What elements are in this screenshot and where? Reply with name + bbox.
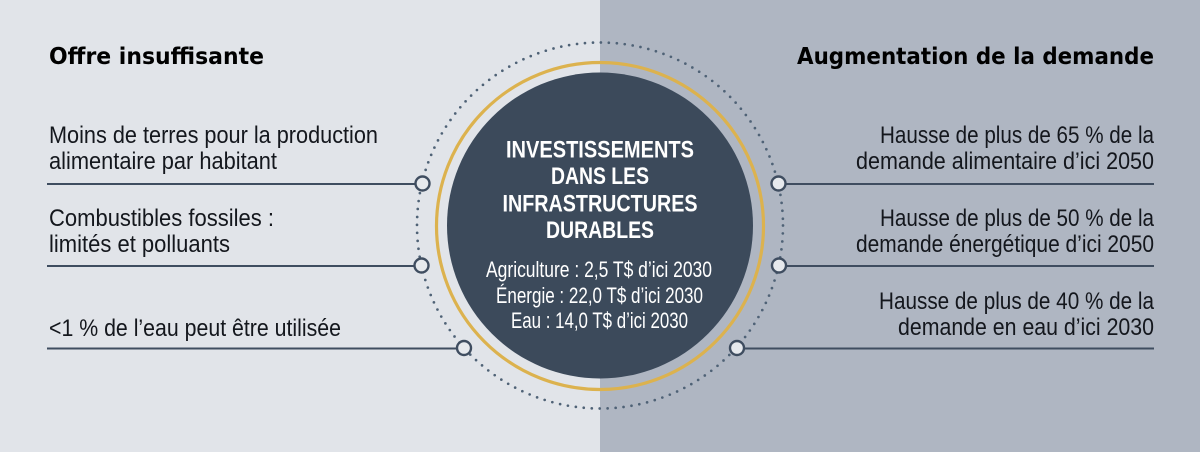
right item: food demand: Hausse de plus de 65 % de la <box>880 122 1154 149</box>
left item: water: <1 % de l’eau peut être utilisée <box>49 315 341 342</box>
right item: water demand <box>730 288 1154 355</box>
heading: left: Offre insuffisante <box>49 44 264 70</box>
left item: fossil fuels: Combustibles fossiles : <box>49 205 274 232</box>
center figures: Énergie : 22,0 T$ d’ici 2030 <box>496 283 703 308</box>
right item: water demand: Hausse de plus de 40 % de la <box>879 288 1154 315</box>
right item: energy demand <box>772 205 1154 272</box>
panel: right background <box>600 0 1200 452</box>
dotted outer ring <box>417 42 783 408</box>
center figures <box>486 257 712 333</box>
left item: land: alimentaire par habitant <box>49 148 277 175</box>
right item: food demand: demande alimentaire d’ici 2050 <box>856 148 1154 175</box>
center figures: Eau : 14,0 T$ d’ici 2030 <box>511 308 688 333</box>
center title: DANS LES <box>551 163 649 190</box>
center title: DURABLES <box>546 217 654 244</box>
left item: water <box>47 315 471 355</box>
right item: energy demand: Hausse de plus de 50 % de la <box>880 205 1154 232</box>
central circle <box>447 72 753 378</box>
panel: left background <box>0 0 600 452</box>
left item: fossil fuels: limités et polluants <box>49 231 230 258</box>
center title: INFRASTRUCTURES <box>502 190 698 218</box>
right item: water demand: demande en eau d’ici 2030 <box>898 314 1154 341</box>
center title: INVESTISSEMENTS <box>506 136 694 164</box>
left item: land: Moins de terres pour la production <box>49 122 378 149</box>
left item: land <box>47 122 430 190</box>
center title <box>502 136 698 244</box>
heading: right: Augmentation de la demande <box>797 44 1154 70</box>
gold ring <box>436 62 764 390</box>
right item: energy demand: demande énergétique d’ici 2050 <box>856 231 1154 258</box>
right item: food demand <box>772 122 1154 190</box>
center figures: Agriculture : 2,5 T$ d’ici 2030 <box>486 257 712 282</box>
left item: fossil fuels <box>47 205 428 272</box>
